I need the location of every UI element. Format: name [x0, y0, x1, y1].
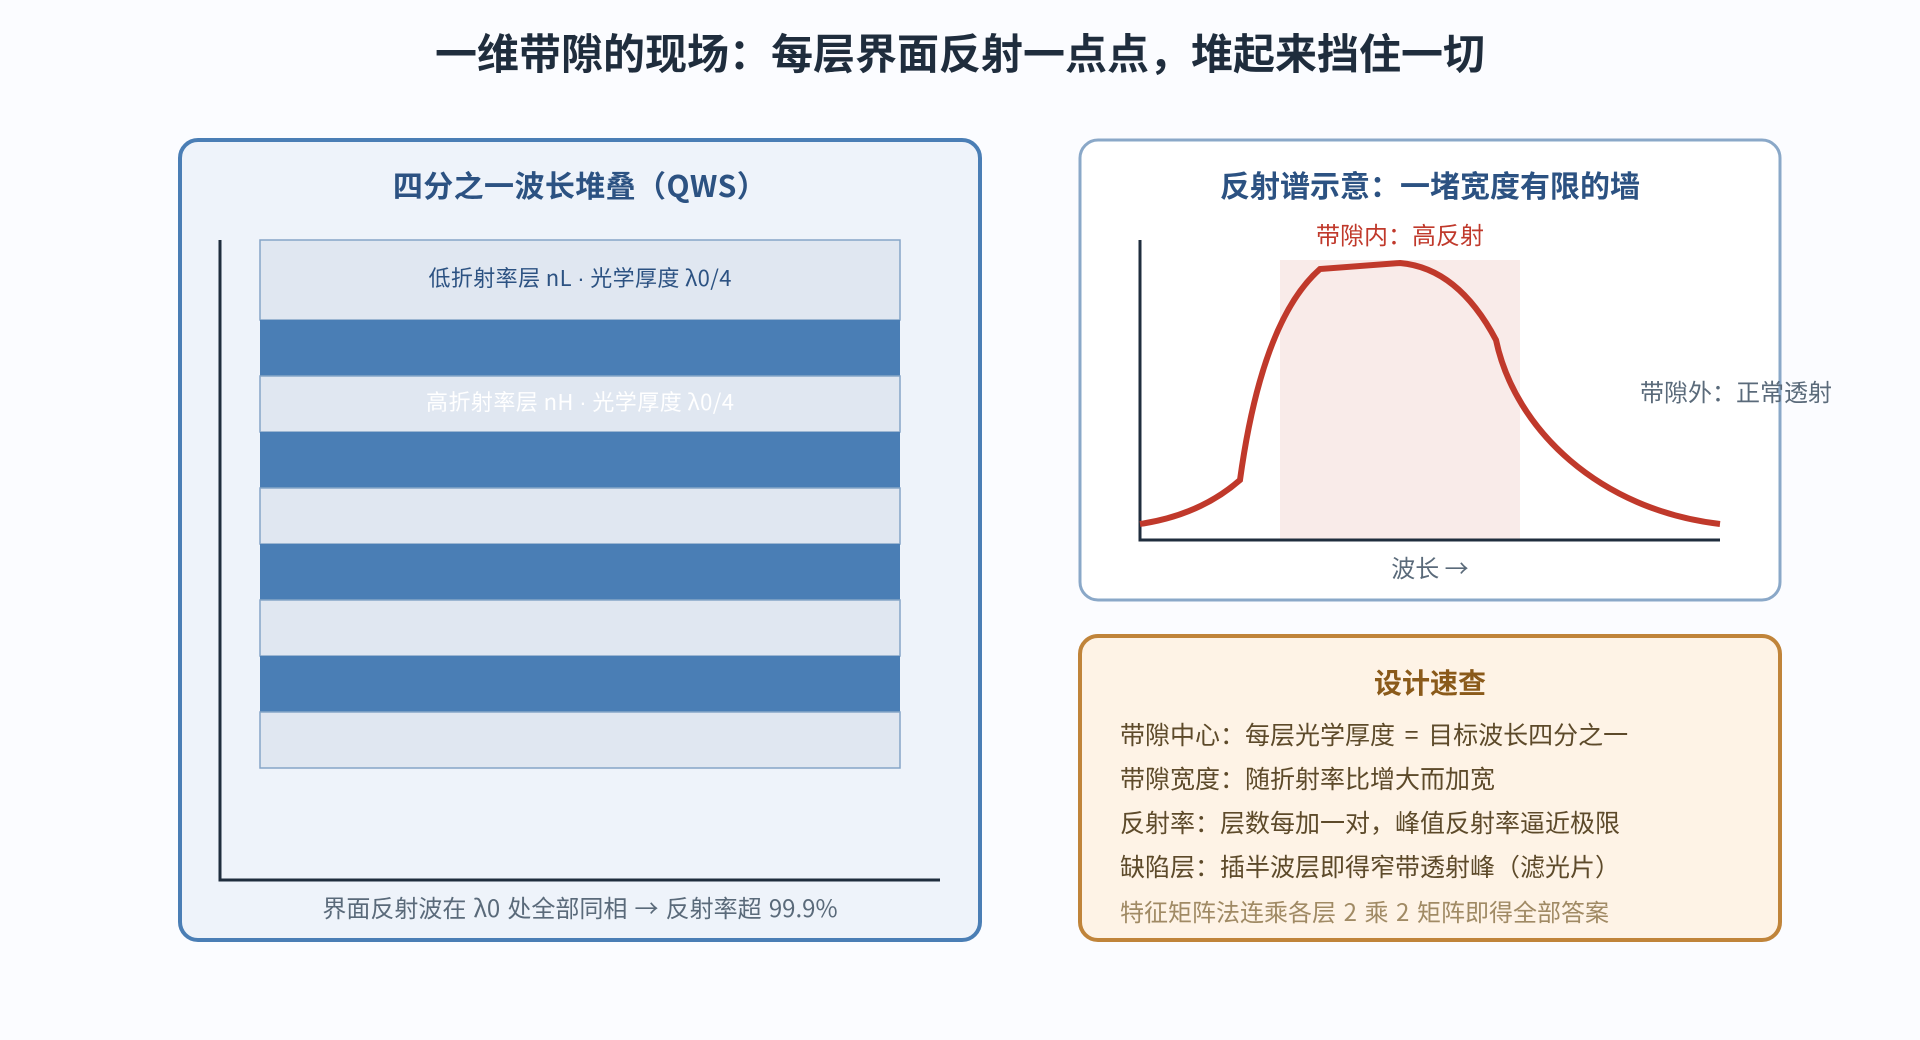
label: out of band: 带隙外：正常透射	[1640, 373, 1832, 408]
layer: high index 4	[260, 656, 900, 712]
panel background	[180, 140, 980, 940]
heading: spectrum: 反射谱示意：一堵宽度有限的墙	[1220, 162, 1640, 206]
axes	[1140, 240, 1720, 540]
layer: low index 1	[260, 240, 900, 320]
reflectance curve	[1140, 263, 1720, 524]
layer: low index 5	[260, 712, 900, 768]
line: band width: 带隙宽度：随折射率比增大而加宽	[1120, 760, 1495, 796]
layer: high index 1	[260, 320, 900, 376]
heading: quick reference: 设计速查	[1374, 662, 1486, 702]
line: characteristic matrix note: 特征矩阵法连乘各层 2 乘 2 矩阵即得全部答案	[1120, 893, 1609, 928]
layer: low index 2	[260, 376, 900, 432]
layer: high index 3	[260, 544, 900, 600]
label: in band: 带隙内：高反射	[1316, 216, 1484, 251]
panel: design quick reference	[1080, 636, 1780, 940]
x axis label: 波长 →	[1391, 549, 1469, 584]
line: band centre: 带隙中心：每层光学厚度 = 目标波长四分之一	[1120, 716, 1628, 752]
panel background	[1080, 140, 1780, 600]
layer stack	[260, 240, 900, 768]
layer: high index 2	[260, 432, 900, 488]
layer: low index 3	[260, 488, 900, 544]
heading: QWS: 四分之一波长堆叠（QWS）	[393, 162, 767, 206]
axes	[220, 240, 940, 880]
label: high index layer: 高折射率层 nH · 光学厚度 λ0/4	[426, 385, 734, 417]
label: low index layer: 低折射率层 nL · 光学厚度 λ0/4	[428, 261, 732, 293]
panel background	[1080, 636, 1780, 940]
caption: 界面反射波在 λ0 处全部同相 → 反射率超 99.9%	[322, 889, 838, 924]
panel: reflection spectrum	[1080, 140, 1832, 600]
layer: low index 4	[260, 600, 900, 656]
panel: quarter-wave stack	[180, 140, 980, 940]
line: reflectivity: 反射率：层数每加一对，峰值反射率逼近极限	[1120, 804, 1620, 840]
band gap shading	[1280, 260, 1520, 540]
line: defect layer: 缺陷层：插半波层即得窄带透射峰（滤光片）	[1120, 848, 1620, 884]
title: 一维带隙的现场：每层界面反射一点点，堆起来挡住一切	[435, 21, 1485, 82]
